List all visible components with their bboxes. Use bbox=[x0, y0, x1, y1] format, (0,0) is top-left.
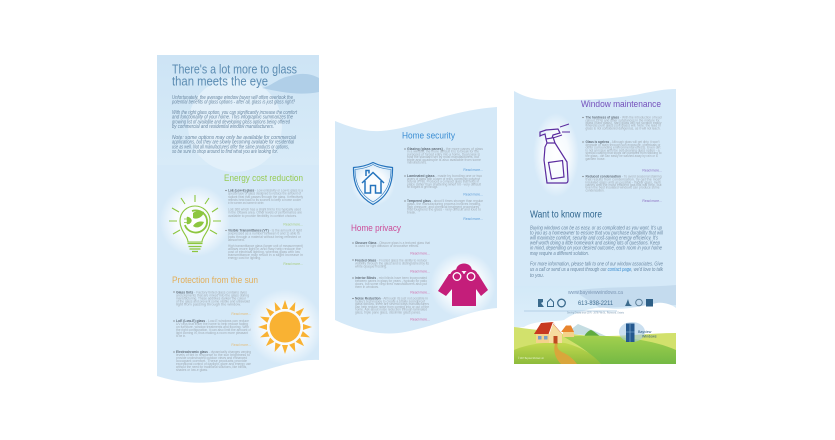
contact text: may require a different solution. bbox=[530, 251, 589, 257]
privacy text: Read more... bbox=[410, 252, 430, 256]
sun protection text: Electrochromic glass - dynamically changes varying bbox=[176, 350, 251, 354]
maintenance text: Read more... bbox=[642, 168, 662, 172]
sun protection text: UV rays that enter the home to help reduce fading bbox=[176, 322, 248, 326]
privacy text: home. Ask about noise reduction through laminated bbox=[355, 308, 427, 312]
privacy text: doors, but some vinyl fired manufacturers also put bbox=[355, 282, 427, 286]
maintenance text: Reduced condensation - To avoid seasonal staining bbox=[586, 174, 662, 178]
security text: in a window, the more difficult it is to break for the bbox=[407, 150, 479, 154]
maintenance text: insulated glass units as possible - thicker glass, multi bbox=[586, 180, 661, 184]
sun protection text: Glass tints - Factory tinted glass contains dyes bbox=[176, 290, 247, 294]
energy text: absorbed. bbox=[228, 238, 245, 242]
contact text: Buying windows can be as easy, or as complicated as you want. It's up bbox=[530, 226, 662, 232]
heading: home privacy: Home privacy bbox=[351, 223, 401, 234]
intro text: Note: some options may only be available for commercial bbox=[172, 135, 297, 141]
contact text: well worth doing a little homework and asking lots of questions. Keep bbox=[530, 240, 660, 246]
maintenance text: that results from condensation, try get the most bbox=[586, 177, 661, 181]
security text bbox=[404, 147, 484, 221]
energy text: allows more light in and may help reduce the bbox=[228, 247, 301, 251]
contact text: For more information, please talk to one of our window associates. Give bbox=[530, 262, 663, 268]
security text: for burglars to get through. bbox=[407, 185, 438, 189]
heading: energy cost reduction: Energy cost reduction bbox=[224, 173, 303, 184]
sun protection text: LoE (Low-E) glass - Low-E windows can reduce bbox=[176, 319, 249, 323]
energy text: transmittance may result in a slight increase in bbox=[228, 253, 303, 257]
maintenance text: degrade or stain through sun exposure, chemicals or bbox=[586, 143, 661, 147]
intro text: With the right glass option, you can significantly increase the comfort bbox=[172, 110, 297, 116]
intro text bbox=[171, 95, 297, 155]
energy text: radiant heat that passes through the glass. It effectively bbox=[228, 195, 303, 199]
contact text: will maximize comfort, security and cost-saving energy efficiency. It's bbox=[530, 236, 658, 242]
privacy text: between panes in glass for years - typically for patio bbox=[355, 279, 427, 283]
security text: place rather than shattering when hit - very difficult bbox=[407, 182, 481, 186]
energy text: High transmittance glass (larger unit of measurement) bbox=[228, 244, 303, 248]
sun protection text: Read more... bbox=[231, 343, 251, 347]
security text: glass, the manufacturing process involves heating, bbox=[407, 202, 481, 206]
privacy text: today's technology to create a totally soundproof bbox=[355, 299, 425, 303]
energy text: in the summer and warmer in winter. bbox=[228, 201, 264, 205]
title: There's a lot more to glass bbox=[172, 62, 297, 76]
maintenance text: other surrounding environmental effects. Even dirt bbox=[586, 146, 661, 150]
sun protection text: to be in. bbox=[176, 334, 186, 338]
privacy text: glass window, there are several ways manufacturers bbox=[355, 302, 429, 306]
maintenance text: The hardness of glass - With the introduction of lead bbox=[586, 116, 662, 120]
security text: Laminated glass - made by bonding one or two bbox=[407, 174, 482, 178]
icon: house bbox=[534, 322, 574, 344]
energy text: LoE (Low-E) glass - Low emissivity or Low-E glass is a bbox=[228, 188, 303, 192]
intro text: so be sure to shop around to find what you are looking for. bbox=[172, 149, 278, 155]
energy text: Visible Transmittance (VT) - Is the amount of light bbox=[228, 228, 302, 232]
contact text: to you as a homeowner to ensure that you purchase durability that will bbox=[530, 230, 664, 236]
heading: want to know more: Want to know more bbox=[530, 208, 602, 220]
security text: triple and quadruple is also available from some bbox=[407, 158, 481, 162]
privacy text: Read more... bbox=[410, 290, 430, 294]
logo: bayview windows: Windows bbox=[642, 334, 657, 338]
security text: that toughens the glass - very difficult and loud to bbox=[407, 208, 481, 212]
security text: purposes of forced entry into a home. Dual pane is bbox=[407, 152, 480, 156]
landscape bbox=[514, 285, 676, 364]
address line: Serving Ottawa since 1976 · 2679 Fifth St., Richmond, Ontario bbox=[567, 310, 624, 314]
website: www.bayviewwindows.ca bbox=[568, 290, 623, 296]
intro text: use as well. Not all manufacturers offer the same products or options, bbox=[172, 144, 289, 150]
icon: person with binoculars bbox=[430, 252, 496, 318]
logo: bayview windows bbox=[619, 322, 657, 342]
maintenance text: whereas pure glass (soft glass) will. Note: the lead in bbox=[586, 124, 661, 128]
sun protection text: occupant comfort. These products provide bbox=[176, 359, 247, 363]
security text: high pressure, and chemical treatment procedures bbox=[407, 205, 479, 209]
maintenance text: condensation. bbox=[586, 188, 605, 192]
security text: manufacturers. bbox=[407, 160, 427, 164]
maintenance text: Read more... bbox=[642, 199, 662, 203]
security text: Read more... bbox=[463, 168, 483, 172]
privacy text: Interior Blinds - mini blinds have been incorporated bbox=[355, 276, 427, 280]
sun protection text: provide unobstructed outdoor views and enhanced bbox=[176, 356, 247, 360]
heading: home security: Home security bbox=[402, 130, 455, 142]
certification logos bbox=[538, 299, 653, 307]
security text: layers of glass with a layer of resin, commonly polyvinyl bbox=[407, 177, 480, 181]
intro text: by commercial and residential window manufacturers. bbox=[172, 124, 274, 130]
privacy text: visibility through the glass and is distinguished by its bbox=[355, 262, 429, 266]
panel: home security and privacy bbox=[335, 107, 497, 334]
privacy text: Read more... bbox=[410, 318, 430, 322]
energy text bbox=[225, 188, 303, 266]
sun protection text: without the need for traditional solutions, like blinds, bbox=[176, 365, 247, 369]
panel: glass introduction and energy and sun bbox=[157, 55, 323, 383]
maintenance text: glass (hard glass), hard glass will not scratch easily bbox=[586, 121, 662, 125]
icon: shield with house bbox=[351, 162, 395, 206]
energy text: (expressed as a number between 0 and 1) able to bbox=[228, 232, 300, 236]
maintenance text: even the best insulated windows can produce some bbox=[586, 186, 660, 190]
sun protection text: levels of tint in response to the sun brightness to bbox=[176, 353, 250, 357]
sun protection text: of the glass and prevent some visible and ultraviolet bbox=[176, 299, 250, 303]
contact text: to you. bbox=[530, 273, 544, 279]
contact text bbox=[530, 226, 664, 279]
energy text: LoE 366 which has a slight tint to it is typically used bbox=[228, 208, 301, 212]
intro text: growing list of available and developing glass options being offered bbox=[172, 119, 290, 125]
phone number: 613-838-2211 bbox=[578, 300, 613, 307]
contact text: in mind, depending on your desired outcome, each room in your home bbox=[530, 246, 662, 252]
privacy text: Noise Reduction - Although its just not possible in bbox=[355, 296, 428, 300]
sun protection text: the right configuration, it can also limit the amount of bbox=[176, 328, 251, 332]
sun protection text: and pigments that are mixed into the glass during bbox=[176, 293, 249, 297]
privacy text: white opaque frosting. bbox=[355, 264, 387, 268]
security text: now the standard set by most manufacturers, but bbox=[407, 155, 479, 159]
heading: protection from the sun: Protection from the sun bbox=[172, 275, 258, 286]
intro text: potential benefits of glass options - after all, glass is just glass right? bbox=[171, 100, 295, 106]
privacy text: Read more... bbox=[410, 270, 430, 274]
energy text: in the Ottawa area. Other levels of performance are bbox=[228, 211, 302, 215]
intro text: applications, but they are slowly becoming available for residential bbox=[172, 140, 295, 146]
copyright: © 2017 Bayview Windows Ltd. bbox=[518, 357, 544, 360]
security text: break. bbox=[407, 210, 416, 214]
contact text: us a call or send us a request through our contact page, we'd love to talk bbox=[530, 267, 663, 273]
maintenance text bbox=[582, 116, 662, 203]
sun protection text: on furniture, window treatments and flooring. With bbox=[176, 325, 249, 329]
energy text: available to provide flexibility in comfort choices. bbox=[228, 214, 297, 218]
intro text: Unfortunately, the average window buyer will often overlook the bbox=[172, 95, 293, 101]
security text: butyral (PVB). Produces a compact glass that holds in bbox=[407, 180, 479, 184]
privacy text: Frosted Glass - Frosted glass the ability to reduce bbox=[355, 258, 427, 262]
maintenance text: special coating that stops dirt particles from sticking to bbox=[586, 151, 662, 155]
privacy text bbox=[352, 241, 430, 322]
panel: maintenance and contact bbox=[514, 89, 676, 364]
intro text: and functionality of your home. This infographic summarizes the bbox=[172, 115, 293, 121]
sun protection text: Read more... bbox=[231, 312, 251, 316]
security text: Read more... bbox=[463, 192, 483, 196]
maintenance text: garden hose. bbox=[586, 157, 606, 161]
icon: light bulb with plug and leaves bbox=[159, 185, 231, 257]
energy text: cost of electrical lighting, whereas glass with low bbox=[228, 250, 301, 254]
privacy text: glass, triple pane glass, dissimilar glass panes. bbox=[355, 310, 421, 314]
sun protection text: light from passing through the window. bbox=[176, 302, 241, 306]
maintenance text: panes and the most efficient gas fills will help, but bbox=[586, 183, 662, 187]
privacy text: Obscure Glass - Obscure glass is a textured glass that bbox=[355, 241, 430, 245]
icon: sun bbox=[247, 289, 323, 365]
sun protection text bbox=[173, 290, 251, 372]
privacy text: is used for light diffusion or decorative effects. bbox=[355, 244, 419, 248]
heading: window maintenance: Window maintenance bbox=[581, 99, 661, 110]
sun protection text: light coming in, thus making a room more pleasant bbox=[176, 331, 248, 335]
energy text: Read more... bbox=[283, 262, 303, 266]
security text: Read more... bbox=[463, 217, 483, 221]
panel: glass introduction and energy and sun: than meets the eye bbox=[172, 74, 268, 88]
intro background bbox=[157, 55, 319, 172]
maintenance text: Glass is ageless - Although glass will get dirty, it won't bbox=[586, 140, 660, 144]
maintenance text: (about 15%) and other substances in the mixture for bbox=[586, 118, 660, 122]
privacy text: them in windows. bbox=[355, 285, 379, 289]
security text: Tempered glass - about 5 times stronger than regular bbox=[407, 199, 484, 203]
energy text: reflects heat back to its sources to keep a home cooler bbox=[228, 198, 302, 202]
energy text: special type of glass designed to reduce the amount of bbox=[228, 192, 301, 196]
energy text: Read more... bbox=[283, 222, 303, 226]
privacy text: can help reduce noise from coming into or out of the bbox=[355, 305, 429, 309]
logo: bayview windows: Bayview bbox=[638, 330, 652, 334]
sun protection text: exceptional control of daylight, glare and energy use bbox=[176, 362, 251, 366]
sun protection text: manufacturing. These additives darken the colour bbox=[176, 296, 247, 300]
energy text: energy cost for lighting. bbox=[228, 256, 261, 260]
energy text: pass through a material without being reflected or bbox=[228, 235, 302, 239]
icon: spray bottle bbox=[533, 113, 579, 197]
maintenance text: the glass - dirt can easily be washed away by rain or a bbox=[586, 154, 658, 158]
maintenance text: is not an issue with the self-cleaning glass option - a bbox=[586, 148, 660, 152]
maintenance text: glass is not considered dangerous, as it will not leach. bbox=[586, 126, 661, 130]
sun protection text: shades or low-e glass. bbox=[176, 368, 208, 372]
security text: Glazing (glass panes) - the more panes of glass bbox=[407, 147, 483, 151]
